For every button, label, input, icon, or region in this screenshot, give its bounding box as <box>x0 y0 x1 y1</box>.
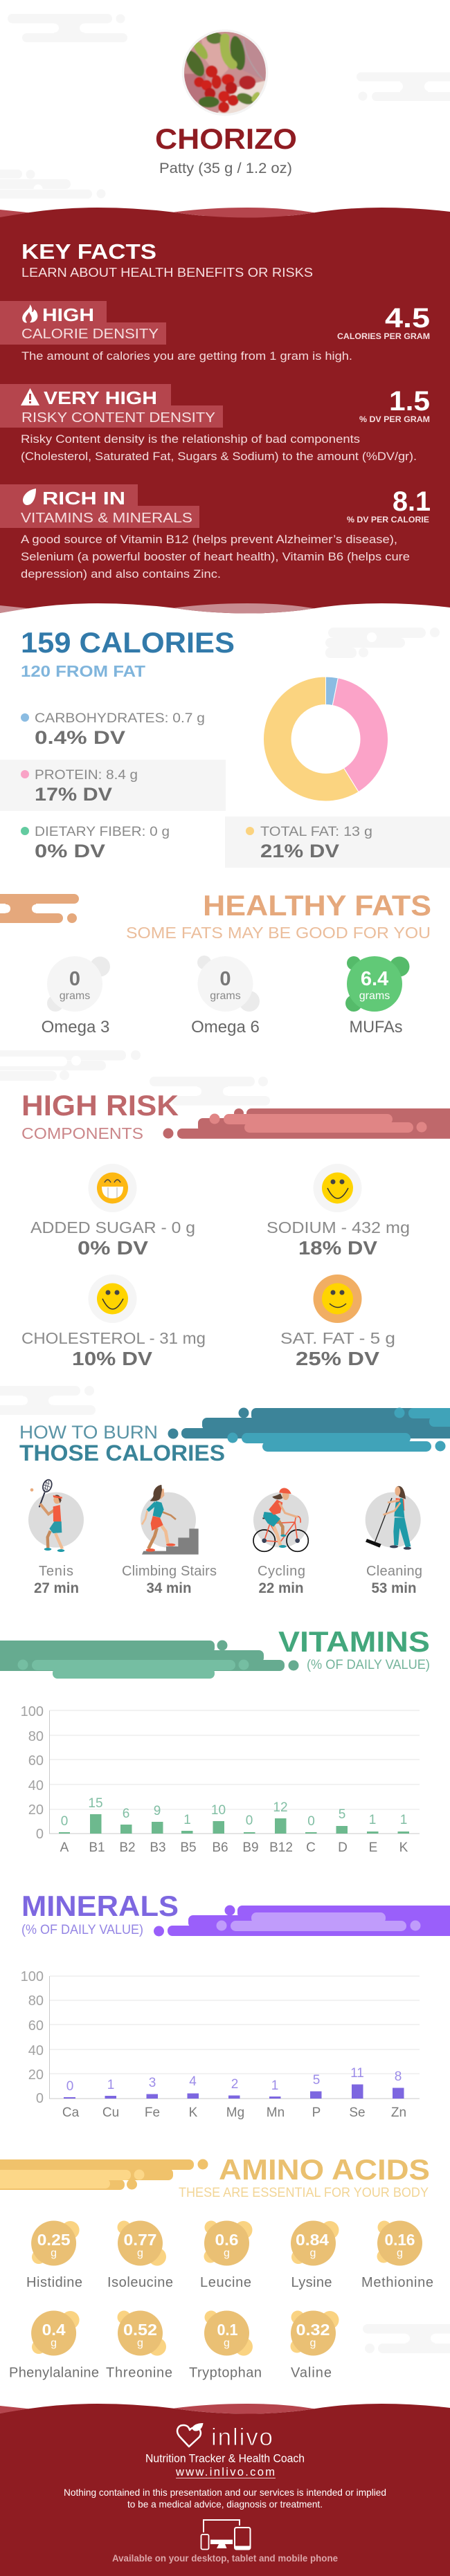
bar chart: vitamins: 0 <box>36 1827 44 1842</box>
amino: methionine: Methionine <box>361 2275 433 2290</box>
amino: histidine: g <box>51 2247 57 2259</box>
amino: isoleucine: g <box>137 2247 143 2259</box>
icon: leaf <box>23 488 36 505</box>
disclaimer: to be a medical advice, diagnosis or treatment. <box>127 2499 323 2510</box>
amino: lysine: 0.84 <box>296 2231 329 2249</box>
bar chart: minerals: Ca <box>62 2105 80 2120</box>
omega 6: grams <box>210 990 241 1002</box>
activity: cycling: Cycling <box>258 1564 305 1579</box>
panel: how to burn those calories: THOSE CALORIES <box>19 1441 225 1465</box>
bar chart: vitamins: 80 <box>28 1729 44 1744</box>
amino: lysine: Lysine <box>291 2275 332 2290</box>
legend: protein: PROTEIN: 8.4 g <box>35 767 138 783</box>
legend: total fat: 21% DV <box>260 841 339 861</box>
omega 3: grams <box>60 990 90 1002</box>
decorative streak <box>0 1640 299 1679</box>
heading: calories: 159 CALORIES <box>21 626 235 659</box>
bar chart: minerals: 5 <box>313 2073 320 2088</box>
donut chart <box>263 677 388 801</box>
disclaimer: Nothing contained in this presentation and our services is intended or implied <box>64 2487 386 2498</box>
amino: valine: g <box>310 2337 316 2349</box>
amino: valine: Valine <box>291 2365 332 2380</box>
amino: phenylalanine <box>9 2311 99 2380</box>
amino: isoleucine: Isoleucine <box>107 2275 173 2290</box>
activity: cycling <box>253 1488 309 1596</box>
sodium <box>267 1164 410 1259</box>
bar chart: minerals: Se <box>349 2105 366 2120</box>
icon: smile face <box>322 1283 353 1315</box>
icon: stair climber <box>141 1485 199 1555</box>
bar chart: minerals: Cu <box>102 2105 119 2120</box>
subheading: THESE ARE ESSENTIAL FOR YOUR BODY <box>179 2185 429 2200</box>
amino: threonine: 0.52 <box>123 2321 157 2339</box>
icon: warning triangle <box>21 388 39 405</box>
bar chart: minerals: 11 <box>350 2066 364 2081</box>
icon: smile face <box>97 1283 128 1315</box>
bar chart: vitamins: B3 <box>150 1840 166 1855</box>
omega 3: Omega 3 <box>42 1018 109 1036</box>
panel: calories <box>0 626 450 868</box>
icon: grin face <box>97 1172 128 1204</box>
fact: rich in vitamins: 8.1 <box>393 486 431 517</box>
bar chart: minerals: Mn <box>267 2105 285 2120</box>
legend: dietary fiber: 0% DV <box>35 841 105 861</box>
bar chart: vitamins: 9 <box>154 1804 161 1818</box>
mufas <box>345 956 410 1036</box>
legend: total fat <box>246 824 372 861</box>
bar chart: minerals: 1 <box>271 2079 278 2093</box>
icon: person sweeping <box>366 1486 421 1550</box>
bar chart: vitamins: 12 <box>273 1800 288 1815</box>
icon: tennis player <box>28 1479 84 1552</box>
fact: very high risky content: VERY HIGH <box>44 387 157 408</box>
activity: climbing stairs <box>122 1485 217 1596</box>
bar chart: vitamins: 0 <box>61 1814 68 1829</box>
bar chart: minerals: 2 <box>231 2077 238 2092</box>
icon: flame <box>22 304 37 322</box>
bar chart: vitamins <box>21 1704 420 1855</box>
bar chart: vitamins: 0 <box>307 1814 315 1829</box>
legend: dietary fiber <box>21 824 170 861</box>
amino: leucine <box>200 2221 252 2290</box>
cholesterol: 10% DV <box>72 1348 152 1369</box>
bar chart: minerals: 60 <box>28 2018 44 2034</box>
heading: HOW TO BURN <box>19 1422 158 1443</box>
panel: footer <box>0 2404 450 2576</box>
bar chart: minerals: Fe <box>145 2105 160 2120</box>
bar chart: minerals: 4 <box>189 2074 197 2089</box>
brand name: inlivo <box>211 2424 273 2451</box>
subheading: calories from fat: 120 FROM FAT <box>21 662 145 680</box>
sodium: 18% DV <box>298 1237 377 1259</box>
amino: methionine: g <box>397 2247 403 2259</box>
omega 6 <box>191 956 260 1036</box>
saturated fat: 25% DV <box>296 1348 379 1369</box>
heading: MINERALS <box>21 1890 179 1922</box>
amino: leucine: Leucine <box>200 2275 251 2290</box>
bar chart: vitamins: A <box>60 1840 69 1855</box>
bar chart: vitamins: E <box>369 1840 377 1855</box>
bar chart: vitamins: 1 <box>369 1813 376 1827</box>
subheading: LEARN ABOUT HEALTH BENEFITS OR RISKS <box>21 265 313 280</box>
amino: tryptophan: g <box>224 2337 230 2349</box>
heading: key facts: KEY FACTS <box>21 239 156 264</box>
amino: histidine <box>26 2221 82 2290</box>
bar chart: minerals: 8 <box>395 2070 402 2084</box>
fact: rich in vitamins: VITAMINS & MINERALS <box>21 510 192 526</box>
bar chart: vitamins: 40 <box>28 1778 44 1793</box>
bar chart: vitamins: 100 <box>21 1704 44 1719</box>
bar chart: vitamins: 5 <box>339 1807 345 1822</box>
panel: healthy fats <box>0 889 431 1036</box>
bar chart: vitamins: D <box>338 1840 348 1855</box>
bar chart: vitamins: 15 <box>88 1796 103 1811</box>
bar chart: vitamins: B2 <box>119 1840 136 1855</box>
bar chart: vitamins: B5 <box>180 1840 197 1855</box>
fact: rich in vitamins: depression) and also contains Zinc. <box>21 567 221 581</box>
cholesterol: CHOLESTEROL - 31 mg <box>21 1329 206 1347</box>
legend: carbohydrates <box>21 711 205 748</box>
bar chart: vitamins: B1 <box>89 1840 105 1855</box>
fact: rich in vitamins <box>0 484 431 581</box>
bar chart: minerals: 0 <box>36 2091 44 2106</box>
panel: how to burn those calories <box>19 1407 450 1596</box>
legend: carbohydrates: 0.4% DV <box>35 727 125 748</box>
activity: tennis: Tenis <box>39 1564 73 1579</box>
amino: phenylalanine: 0.4 <box>42 2321 66 2339</box>
activity: cleaning: Cleaning <box>366 1564 422 1579</box>
subheading: (% OF DAILY VALUE) <box>307 1658 430 1672</box>
bar chart: vitamins: 10 <box>211 1803 226 1818</box>
amino: threonine: Threonine <box>106 2365 172 2380</box>
omega 6: 0 <box>219 968 231 990</box>
amino: methionine <box>361 2221 433 2290</box>
added sugar: 0% DV <box>78 1237 148 1259</box>
amino: phenylalanine: Phenylalanine <box>9 2365 99 2380</box>
fact: high calorie density: 4.5 <box>385 303 430 334</box>
saturated fat <box>280 1275 395 1369</box>
amino: valine <box>291 2311 339 2380</box>
mufas: 6.4 <box>361 968 388 990</box>
added sugar: ADDED SUGAR - 0 g <box>30 1218 195 1236</box>
amino: lysine <box>291 2221 339 2290</box>
fact: rich in vitamins: % DV PER CALORIE <box>347 515 429 524</box>
icon: cyclist <box>253 1488 309 1551</box>
fact: high calorie density: CALORIES PER GRAM <box>337 331 430 341</box>
icon: inlivo heart logo <box>177 2423 204 2447</box>
heading: HEALTHY FATS <box>203 889 431 922</box>
subheading: (% OF DAILY VALUE) <box>21 1923 143 1937</box>
sodium: SODIUM - 432 mg <box>267 1218 410 1236</box>
activity: climbing stairs: Climbing Stairs <box>122 1564 217 1579</box>
amino: methionine: 0.16 <box>385 2231 415 2249</box>
website link: www.inlivo.com <box>175 2466 275 2478</box>
activity: cycling: 22 min <box>259 1580 303 1596</box>
amino: isoleucine <box>107 2221 173 2290</box>
decorative streak <box>0 894 80 923</box>
bar chart: vitamins: B12 <box>269 1840 293 1855</box>
bar chart: minerals: 100 <box>21 1969 44 1984</box>
omega 6: Omega 6 <box>191 1018 260 1036</box>
amino: tryptophan <box>189 2311 262 2380</box>
panel: high risk components <box>21 1089 450 1369</box>
bar chart: minerals <box>21 1969 420 2120</box>
panel: minerals <box>21 1890 450 2120</box>
bar chart: minerals: Mg <box>226 2105 244 2120</box>
amino: histidine: 0.25 <box>37 2231 71 2249</box>
heading: AMINO ACIDS <box>219 2153 430 2186</box>
legend: dietary fiber: DIETARY FIBER: 0 g <box>35 824 170 839</box>
fact: high calorie density: The amount of calories you are getting from 1 gram is high. <box>21 349 352 363</box>
amino: isoleucine: 0.77 <box>123 2231 156 2249</box>
fact: rich in vitamins: A good source of Vitamin B12 (helps prevent Alzheimer’s disease), <box>21 533 397 546</box>
subheading: SOME FATS MAY BE GOOD FOR YOU <box>126 924 431 942</box>
fact: rich in vitamins: Selenium (a powerful booster of heart health), Vitamin B6 (helps cure <box>21 550 410 563</box>
activity: tennis <box>28 1479 84 1596</box>
amino: phenylalanine: g <box>51 2337 57 2349</box>
subheading: COMPONENTS <box>21 1124 143 1142</box>
disclaimer <box>64 2487 386 2510</box>
bar chart: minerals: 20 <box>28 2067 44 2083</box>
serving size: Patty (35 g / 1.2 oz) <box>159 161 292 176</box>
decorative streak <box>0 2159 208 2190</box>
activity: tennis: 27 min <box>34 1580 79 1596</box>
bar chart: minerals: 40 <box>28 2043 44 2058</box>
amino: leucine: g <box>224 2247 230 2259</box>
panel: key facts <box>0 208 450 619</box>
fact: rich in vitamins: RICH IN <box>42 488 125 509</box>
fact: high calorie density <box>0 301 430 363</box>
bar chart: vitamins: 60 <box>28 1753 44 1769</box>
activity: climbing stairs: 34 min <box>147 1580 191 1596</box>
fact: very high risky content <box>0 384 430 463</box>
bar chart: minerals: 80 <box>28 1993 44 2009</box>
fact: very high risky content: Risky Content density is the relationship of bad components <box>21 432 360 446</box>
bar chart: vitamins: 6 <box>123 1807 129 1821</box>
bar chart: vitamins: 1 <box>183 1813 191 1827</box>
bar chart: minerals: K <box>189 2105 198 2120</box>
bar chart: vitamins: 20 <box>28 1802 44 1818</box>
fact: high calorie density: HIGH <box>42 304 94 325</box>
decorative streak <box>154 1906 450 1936</box>
food photo <box>180 28 270 118</box>
decorative streak <box>168 1407 450 1452</box>
heading: HIGH RISK <box>21 1089 179 1122</box>
bar chart: minerals: P <box>312 2105 321 2120</box>
saturated fat: SAT. FAT - 5 g <box>280 1329 395 1347</box>
amino: tryptophan: 0.1 <box>217 2321 238 2339</box>
added sugar <box>30 1164 195 1259</box>
amino: threonine <box>106 2311 172 2380</box>
legend: protein: 17% DV <box>35 784 112 805</box>
bar chart: minerals: Zn <box>391 2105 406 2120</box>
fact: very high risky content: (Cholesterol, Saturated Fat, Sugars & Sodium) to the amount (%DV/gr). <box>21 450 417 463</box>
bar chart: vitamins: 0 <box>246 1814 253 1828</box>
heading: VITAMINS <box>278 1625 430 1658</box>
legend: total fat: TOTAL FAT: 13 g <box>260 824 372 839</box>
bar chart: vitamins: 1 <box>400 1813 407 1827</box>
omega 3 <box>42 956 110 1036</box>
legend: protein <box>21 767 138 805</box>
cholesterol <box>21 1275 206 1369</box>
fact: very high risky content: RISKY CONTENT DENSITY <box>21 410 215 426</box>
bar chart: minerals: 3 <box>149 2076 156 2090</box>
fact: very high risky content: % DV PER GRAM <box>359 414 430 424</box>
activity: cleaning <box>366 1486 422 1596</box>
availability note: Available on your desktop, tablet and mobile phone <box>112 2552 338 2564</box>
amino: leucine: 0.6 <box>215 2231 238 2249</box>
icon: smile face <box>322 1172 353 1204</box>
bar chart: vitamins: C <box>306 1840 316 1855</box>
panel: amino acids <box>0 2153 433 2380</box>
mufas: grams <box>359 990 390 1002</box>
activity: cleaning: 53 min <box>371 1580 417 1596</box>
amino: tryptophan: Tryptophan <box>189 2365 262 2380</box>
panel: vitamins <box>0 1625 430 1855</box>
title: CHORIZO <box>155 122 297 155</box>
icon: devices <box>201 2520 251 2549</box>
bar chart: vitamins: B9 <box>242 1840 259 1855</box>
fact: very high risky content: 1.5 <box>389 386 430 417</box>
amino: lysine: g <box>310 2247 316 2259</box>
bar chart: vitamins: K <box>399 1840 408 1855</box>
bar chart: vitamins: B6 <box>212 1840 228 1855</box>
amino: histidine: Histidine <box>26 2275 82 2290</box>
amino: valine: 0.32 <box>296 2321 330 2339</box>
bar chart: minerals: 1 <box>107 2078 114 2092</box>
fact: high calorie density: CALORIE DENSITY <box>21 326 159 342</box>
amino: threonine: g <box>137 2337 143 2349</box>
omega 3: 0 <box>69 968 80 990</box>
tagline: Nutrition Tracker & Health Coach <box>145 2452 305 2465</box>
decorative streak <box>163 1108 450 1139</box>
legend: carbohydrates: CARBOHYDRATES: 0.7 g <box>35 711 205 726</box>
bar chart: minerals: 0 <box>66 2079 73 2094</box>
mufas: MUFAs <box>349 1018 403 1036</box>
